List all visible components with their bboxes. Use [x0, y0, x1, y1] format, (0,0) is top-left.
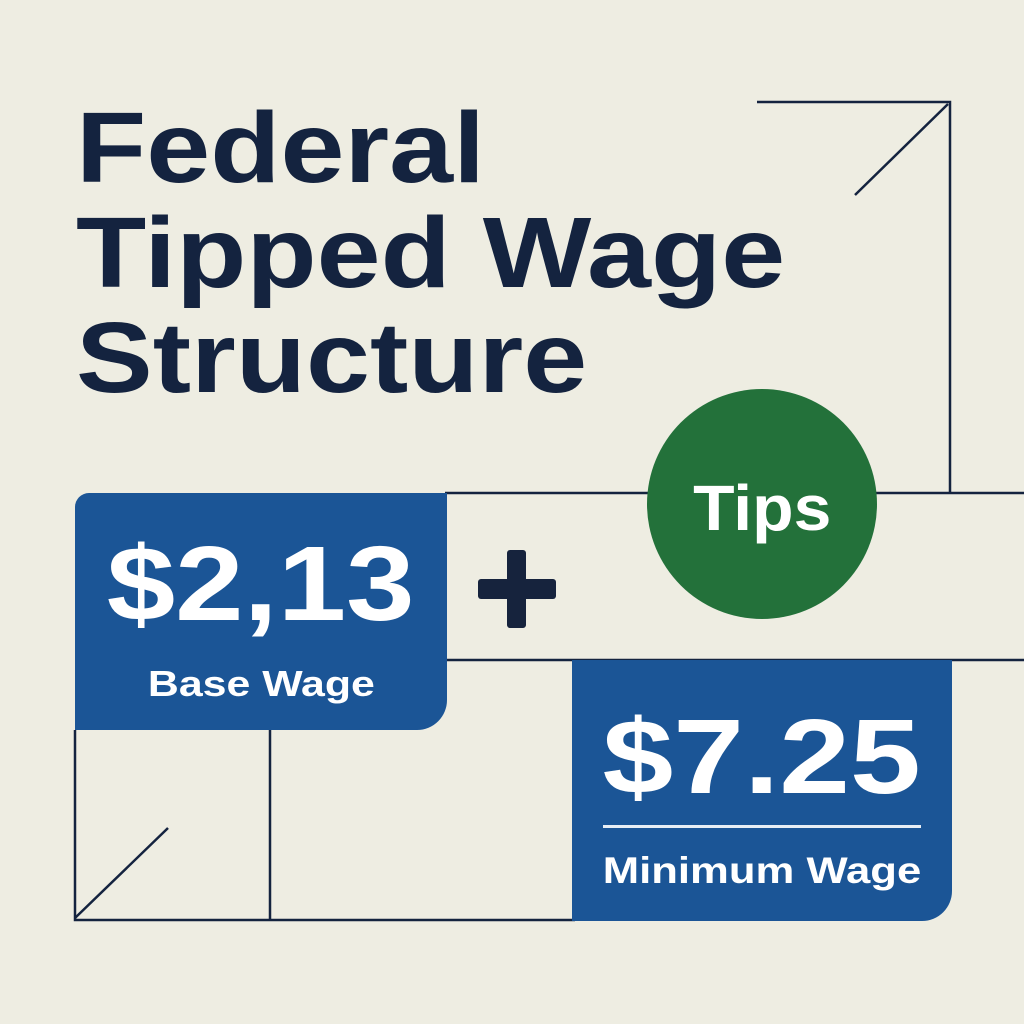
base wage label: Base Wage [148, 663, 374, 704]
panel: base wage [75, 493, 447, 730]
minimum wage amount: $7.25 [603, 698, 921, 816]
icon: plus sign [478, 550, 556, 628]
base wage amount: $2,13 [107, 525, 415, 643]
title: Structure [76, 302, 587, 414]
tips circle: Tips [693, 472, 831, 544]
tips circle [647, 389, 877, 619]
title: Tipped Wage [76, 197, 785, 309]
divider in panel [603, 825, 921, 828]
title: Federal [76, 92, 485, 204]
minimum wage label: Minimum Wage [603, 850, 921, 891]
panel: minimum wage [572, 660, 952, 921]
title [76, 92, 785, 414]
